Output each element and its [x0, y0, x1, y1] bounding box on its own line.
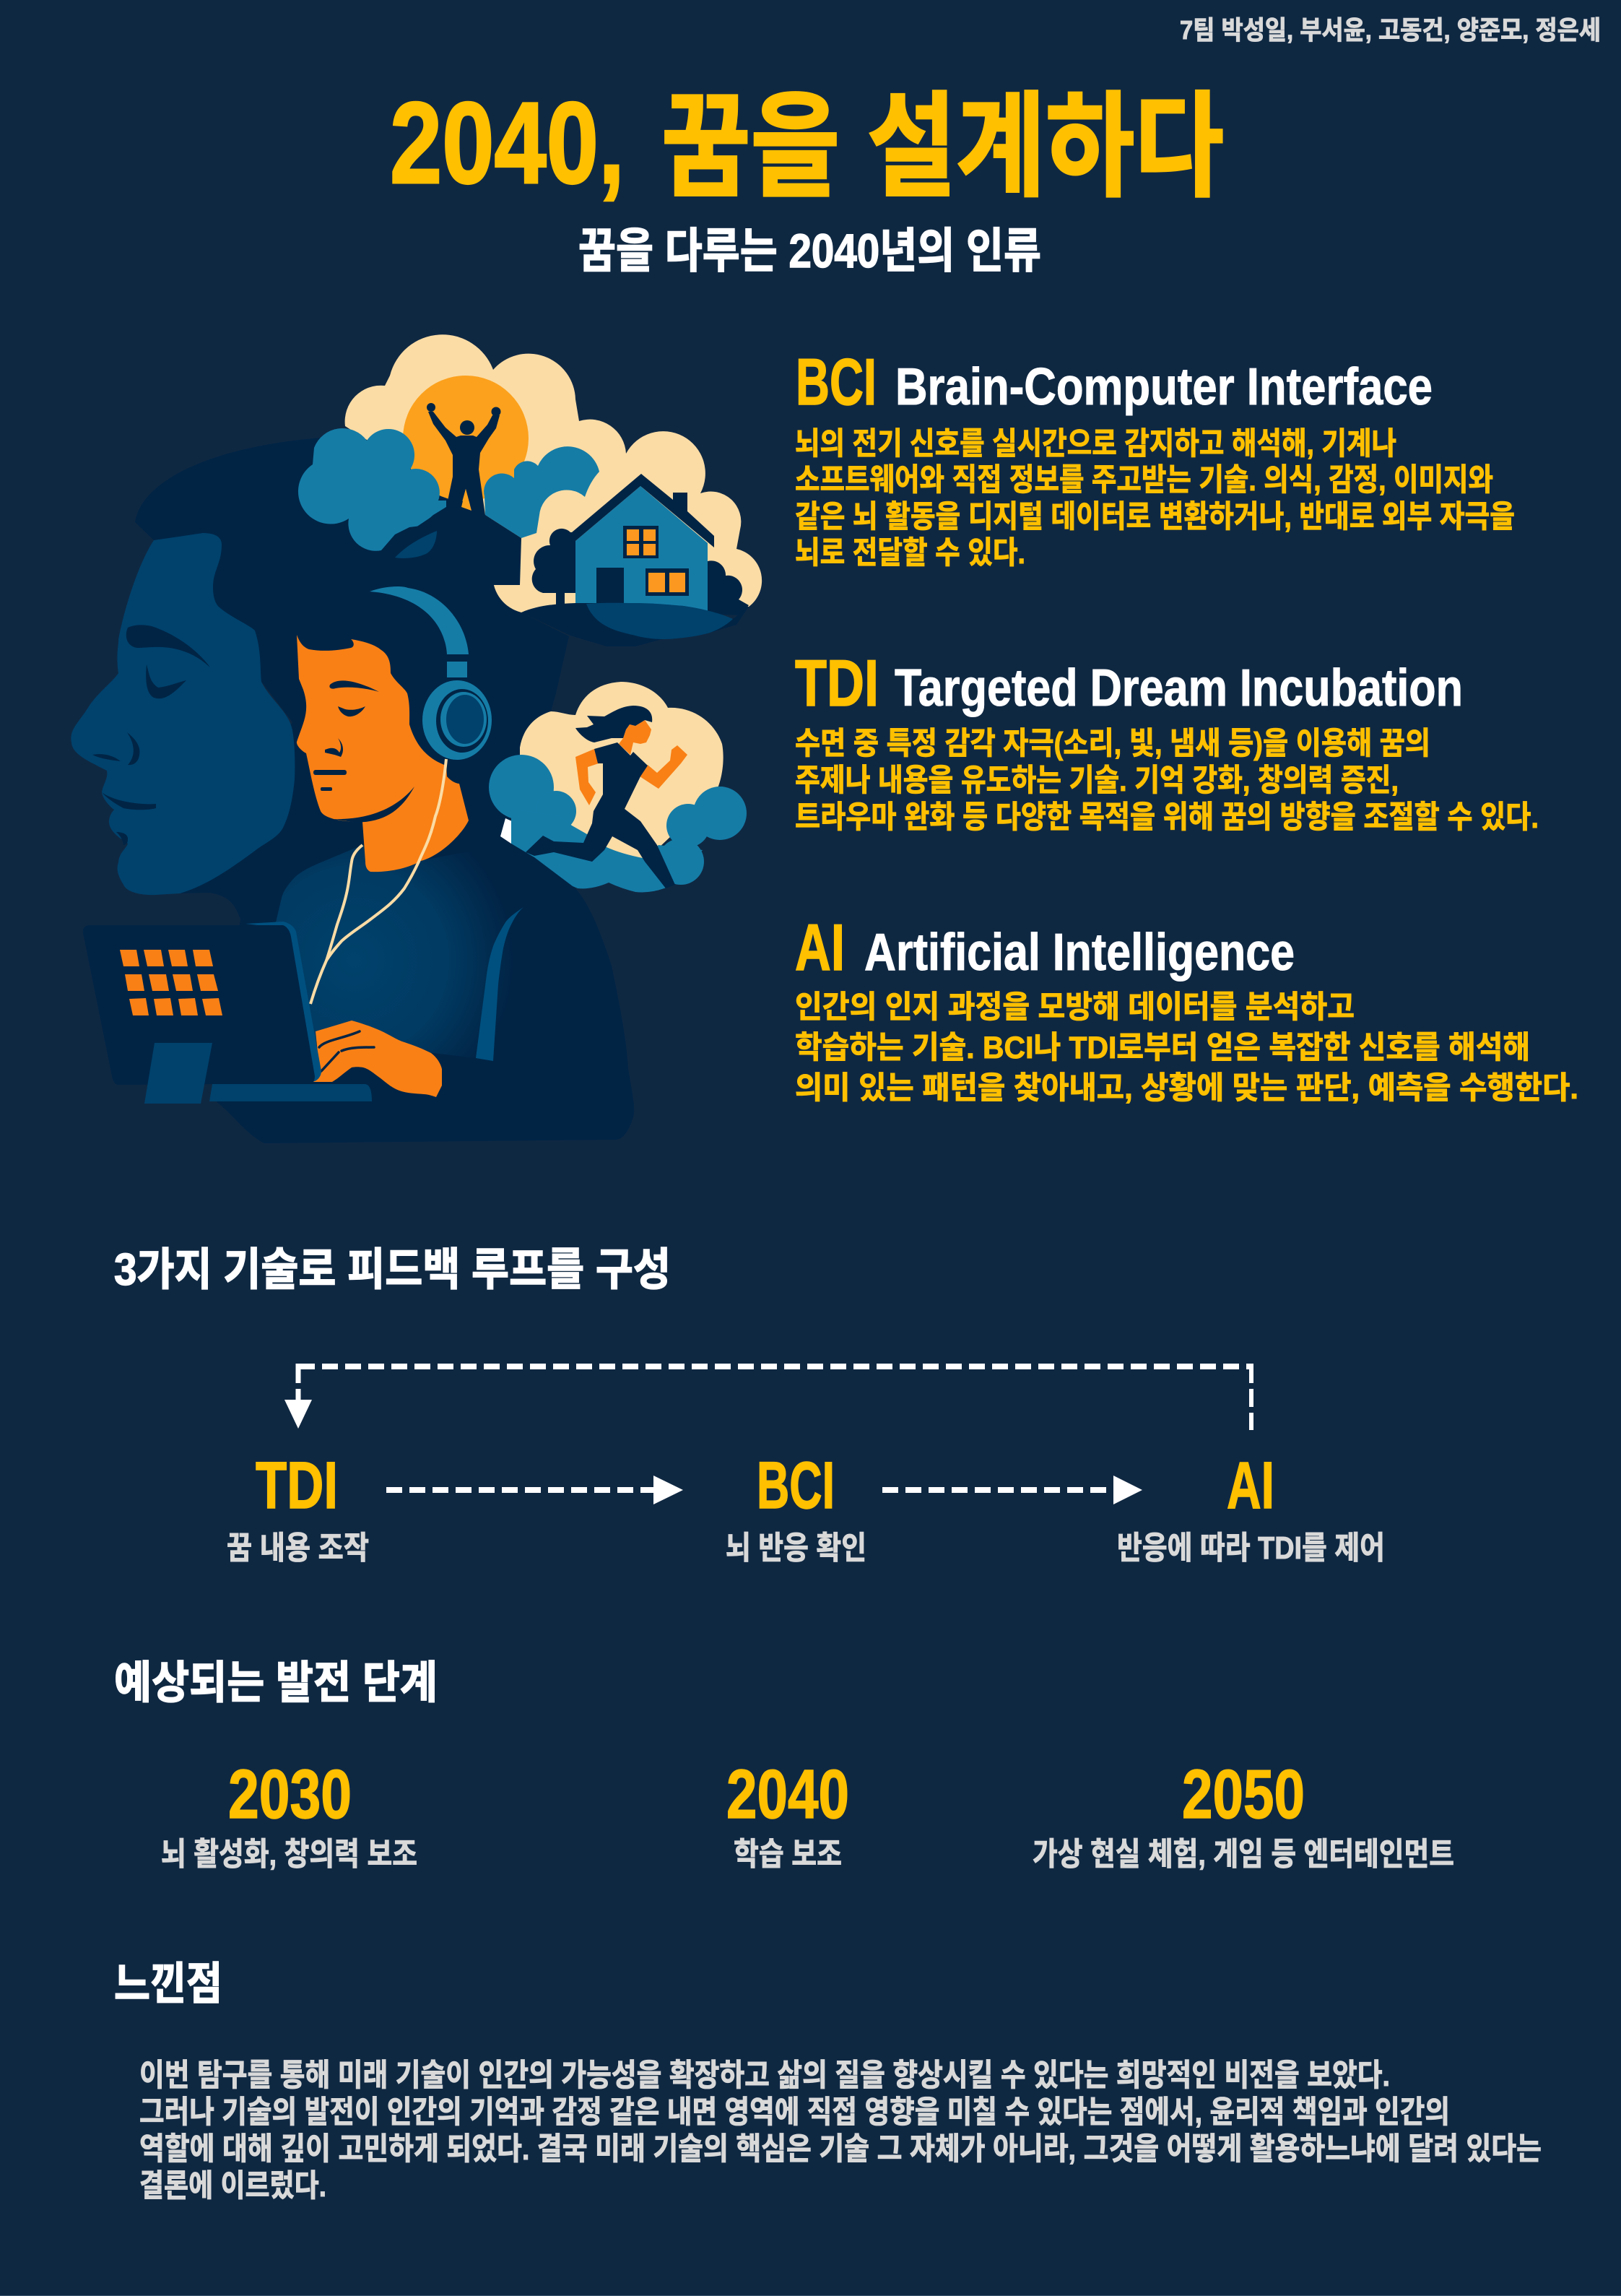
tree right	[708, 560, 749, 615]
laptop edge	[245, 922, 321, 1082]
leaf on hill	[395, 531, 437, 558]
TDI node: 꿈 내용 조작	[227, 1530, 369, 1566]
large face features	[92, 625, 210, 845]
laptop base	[209, 1084, 372, 1101]
AI description: 의미 있는 패턴을 찾아내고, 상황에 맞는 판단, 예측을 수행한다.	[795, 1071, 1578, 1106]
small face features	[313, 680, 414, 822]
BCI description: 소프트웨어와 직접 정보를 주고받는 기술. 의식, 감정, 이미지와	[795, 463, 1493, 498]
BCI description	[795, 427, 1515, 571]
BCI block	[795, 346, 1515, 571]
heading: reflections: 느낀점	[114, 1959, 222, 2009]
reflections text	[139, 2058, 1542, 2204]
feedback loop diagram	[227, 1364, 1385, 1566]
AI full name: Artificial Intelligence	[864, 924, 1295, 982]
stage 2030	[161, 1756, 417, 1872]
BCI heading: BCI	[796, 346, 877, 419]
stage 2030: 뇌 활성화, 창의력 보조	[161, 1837, 417, 1872]
runner hair	[575, 706, 652, 742]
laptop orange keys	[120, 950, 222, 1015]
large face profile	[71, 533, 295, 895]
BCI node: BCI	[757, 1449, 835, 1522]
AI description: 인간의 인지 과정을 모방해 데이터를 분석하고	[795, 990, 1355, 1025]
runner	[526, 706, 687, 888]
AI block	[795, 911, 1578, 1106]
TDI full name: Targeted Dream Incubation	[895, 659, 1463, 717]
tree left	[532, 529, 575, 605]
illustration: dreaming person	[71, 334, 762, 1143]
small face and neck	[297, 635, 469, 872]
stage 2050	[1033, 1756, 1454, 1872]
hill	[381, 502, 521, 585]
runner arm front	[640, 745, 687, 789]
left teal cloud	[298, 428, 446, 551]
house dream cloud: cream	[345, 334, 762, 612]
stage 2050: 가상 현실 체험, 게임 등 엔터테인먼트	[1033, 1837, 1454, 1872]
hair and body silhouette	[135, 438, 634, 1143]
AI node	[1117, 1449, 1385, 1566]
BCI description: 뇌의 전기 신호를 실시간으로 감지하고 해석해, 기계나	[795, 427, 1396, 462]
heading: development stages: 예상되는 발전 단계	[114, 1658, 438, 1708]
sun	[403, 376, 529, 501]
BCI description: 같은 뇌 활동을 디지털 데이터로 변환하거나, 반대로 외부 자극을	[795, 500, 1515, 534]
AI description: 학습하는 기술. BCI나 TDI로부터 얻은 복잡한 신호를 해석해	[795, 1031, 1530, 1065]
chest and sweater	[276, 845, 578, 1058]
runner cloud: teal	[489, 755, 747, 892]
reflections text: 결론에 이르렀다.	[139, 2169, 326, 2204]
TDI description: 주제나 내용을 유도하는 기술. 기억 강화, 창의력 증진,	[795, 763, 1399, 798]
stage 2050: 2050	[1182, 1756, 1305, 1833]
AI node: AI	[1227, 1449, 1274, 1522]
runner arm back	[575, 749, 599, 805]
arrow TDI to BCI	[386, 1476, 683, 1504]
stage 2040: 학습 보조	[734, 1837, 842, 1872]
white sliver	[500, 818, 520, 844]
AI node: 반응에 따라 TDI를 제어	[1117, 1530, 1385, 1566]
subtitle: 꿈을 다루는 2040년의 인류	[578, 224, 1041, 277]
title: 2040,	[390, 78, 625, 207]
laptop back	[83, 925, 315, 1085]
TDI node	[227, 1449, 369, 1566]
arrow BCI to AI	[882, 1476, 1142, 1504]
TDI description	[795, 727, 1539, 835]
BCI description: 뇌로 전달할 수 있다.	[795, 536, 1025, 571]
blue dome ground	[586, 603, 733, 639]
right teal cloud	[484, 446, 599, 538]
orange gap between legs	[461, 489, 471, 511]
runner cloud: cream	[520, 682, 723, 863]
reflections text: 이번 탐구를 통해 미래 기술이 인간의 가능성을 확장하고 삶의 질을 향상시킬 수 있다는 희망적인 비전을 보았다.	[139, 2058, 1390, 2093]
AI heading: AI	[795, 911, 845, 984]
stage 2040	[726, 1756, 849, 1872]
TDI block	[795, 647, 1539, 835]
arrowhead into TDI	[284, 1400, 312, 1429]
AI description	[795, 990, 1578, 1106]
dashed return path from AI to TDI	[298, 1364, 1251, 1430]
TDI heading: TDI	[795, 647, 879, 720]
earphone cord	[310, 759, 446, 1004]
BCI node: 뇌 반응 확인	[726, 1530, 866, 1566]
BCI full name: Brain-Computer Interface	[895, 358, 1433, 416]
finger lines	[319, 1031, 374, 1071]
laptop stand	[144, 1043, 212, 1104]
BCI node	[726, 1449, 866, 1566]
runner face	[619, 720, 651, 755]
TDI description: 수면 중 특정 감각 자극(소리, 빛, 냄새 등)을 이용해 꿈의	[795, 727, 1430, 761]
ground under house	[521, 603, 749, 646]
TDI node: TDI	[256, 1449, 338, 1522]
hand	[312, 1021, 442, 1097]
reflections text: 그러나 기술의 발전이 인간의 기억과 감정 같은 내면 영역에 직접 영향을 미칠 수 있다는 점에서, 윤리적 책임과 인간의	[139, 2095, 1450, 2130]
title	[390, 78, 1224, 211]
timeline	[161, 1756, 1454, 1872]
house	[572, 474, 714, 612]
figure with raised arms	[427, 403, 501, 515]
stage 2040: 2040	[726, 1756, 849, 1833]
TDI description: 트라우마 완화 등 다양한 목적을 위해 꿈의 방향을 조절할 수 있다.	[795, 800, 1539, 835]
sleeve stripe	[476, 907, 523, 1061]
headphones	[370, 586, 492, 760]
runner body	[526, 742, 675, 888]
heading: feedback loop: 3가지 기술로 피드백 루프를 구성	[114, 1245, 671, 1295]
stage 2030: 2030	[228, 1756, 352, 1833]
title: 꿈을 설계하다	[661, 84, 1224, 211]
